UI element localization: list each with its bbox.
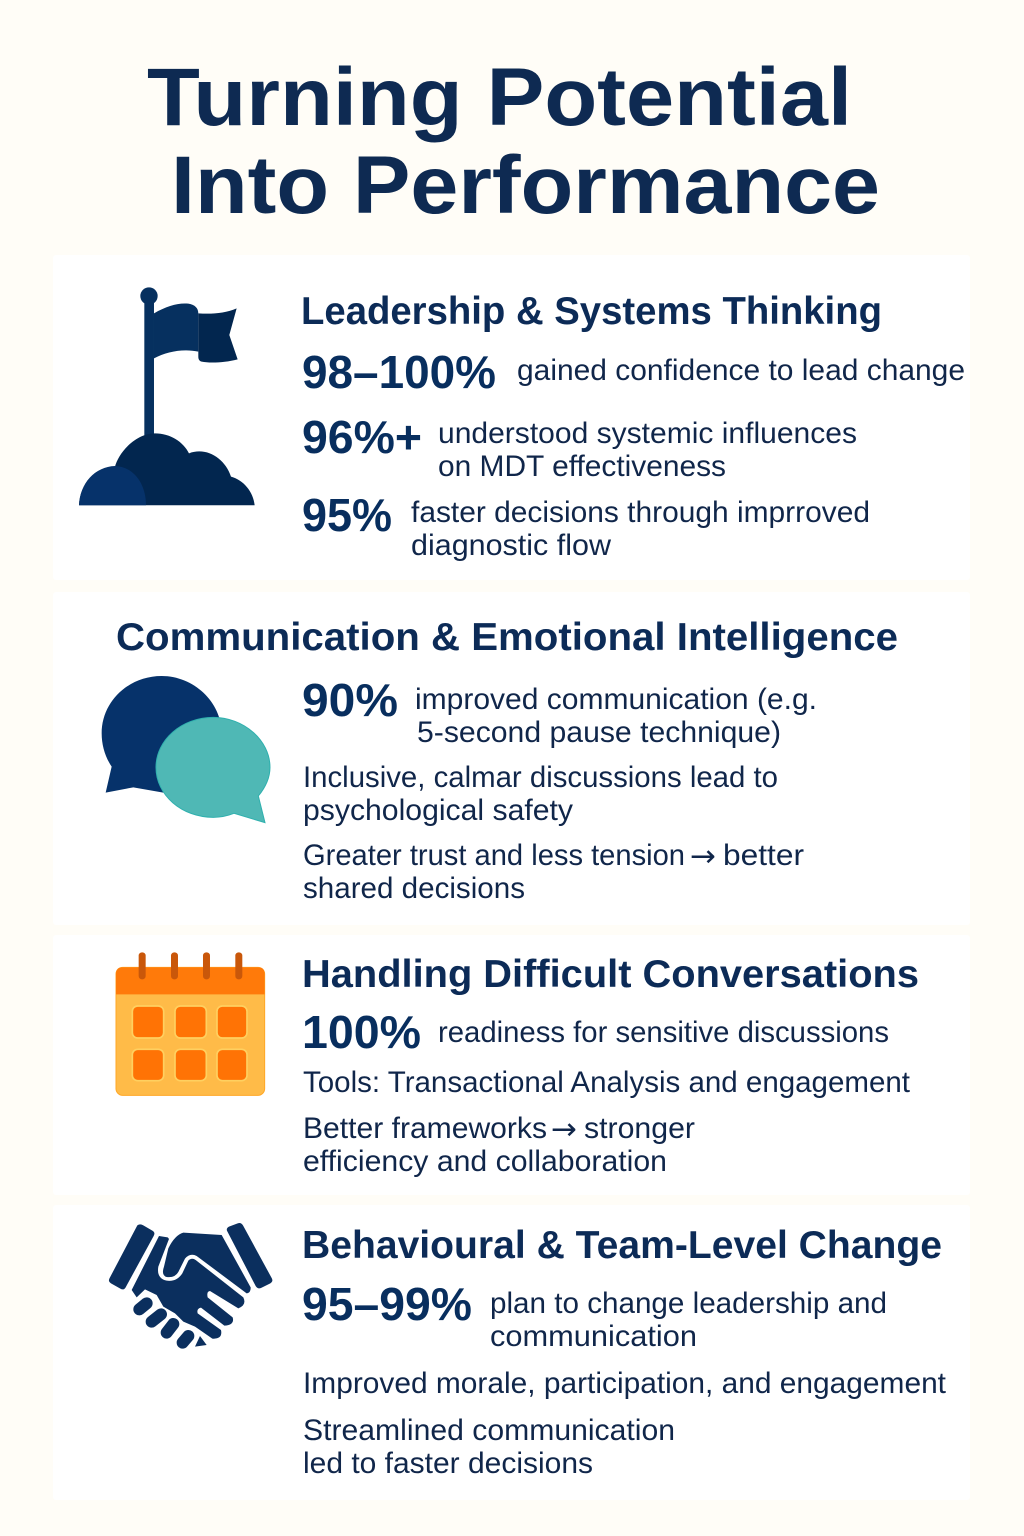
text: tools: Tools: Transactional Analysis and engagement [303, 1066, 911, 1099]
stat: 90%: 90% [302, 674, 398, 726]
text: trust: → [690, 839, 716, 874]
stat: 95–99%: plan to change leadership and [490, 1287, 887, 1320]
icon: speech bubbles [102, 676, 270, 823]
stat: 100% [302, 1006, 889, 1058]
stat: 90%: improved communication (e.g. [415, 683, 817, 716]
text: frameworks: stronger [584, 1112, 695, 1145]
text: trust: better [723, 839, 804, 872]
text: streamlined communication: Streamlined communication [303, 1414, 675, 1447]
stat: 98–100%: gained confidence to lead change [517, 354, 965, 387]
stat: 90%: 5-second pause technique) [417, 716, 781, 749]
text: psychological safety: psychological safety [303, 794, 573, 827]
text: trust: shared decisions [303, 872, 525, 905]
stat: 90% [302, 674, 817, 749]
heading: Handling Difficult Conversations [302, 953, 919, 996]
stat: 95–99%: communication [490, 1320, 697, 1353]
title [147, 52, 880, 231]
text: morale: Improved morale, participation, and engagement [303, 1367, 947, 1400]
heading: Communication & Emotional Intelligence [116, 616, 898, 659]
text: psychological safety [303, 761, 778, 827]
stat: 96%+: understood systemic influences [438, 417, 857, 450]
heading: Behavioural & Team-Level Change [302, 1224, 942, 1267]
stat: 98–100%: 98–100% [302, 346, 496, 398]
stat: 95%: diagnostic flow [411, 529, 611, 562]
stat: 95–99% [302, 1278, 887, 1353]
panel: behavioural and team-level change [53, 1205, 970, 1500]
text: frameworks: → [551, 1112, 577, 1147]
stat: 95%: faster decisions through imprroved [411, 496, 870, 529]
heading: Leadership & Systems Thinking [301, 290, 882, 333]
stat: 96%+ [302, 411, 857, 483]
panel: leadership and systems thinking [53, 255, 970, 580]
stat: 100%: 100% [302, 1006, 421, 1058]
stat: 96%+: 96%+ [302, 411, 422, 463]
text: trust [303, 839, 804, 905]
panel: handling difficult conversations [53, 935, 970, 1195]
text: frameworks [303, 1112, 695, 1178]
text: psychological safety: Inclusive, calmar discussions lead to [303, 761, 778, 794]
title: Into Performance [171, 140, 880, 231]
icon: flag on hill [79, 287, 255, 505]
icon: handshake [109, 1223, 272, 1347]
icon: calendar [116, 952, 265, 1095]
stat: 95%: 95% [302, 489, 392, 541]
text: streamlined communication: led to faster decisions [303, 1447, 593, 1480]
stat: 98–100% [302, 346, 965, 398]
text: trust: Greater trust and less tension [303, 839, 685, 872]
text: frameworks: efficiency and collaboration [303, 1145, 667, 1178]
text: streamlined communication [303, 1414, 675, 1480]
stat: 95–99%: 95–99% [302, 1278, 472, 1330]
stat: 100%: readiness for sensitive discussions [438, 1016, 889, 1049]
stat: 95% [302, 489, 870, 562]
panel: communication and emotional intelligence [53, 592, 970, 925]
text: frameworks: Better frameworks [303, 1112, 547, 1145]
title: Turning Potential [147, 52, 852, 143]
stat: 96%+: on MDT effectiveness [438, 450, 726, 483]
